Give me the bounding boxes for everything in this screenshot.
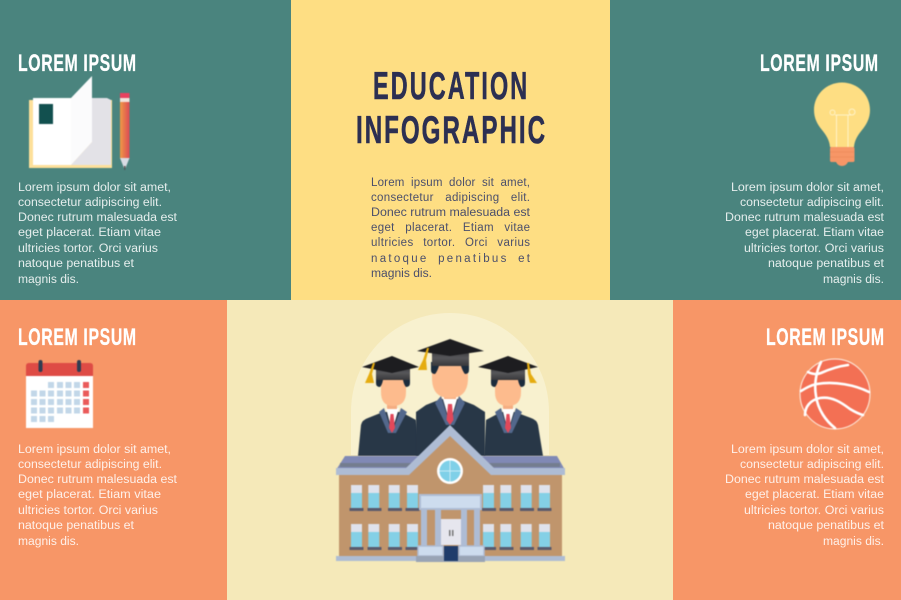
text block: bottom right: eget placerat. Etiam vitae	[745, 489, 884, 501]
text block: bottom right: Lorem ipsum dolor sit amet,	[731, 444, 884, 456]
text block: centre: eget placerat. Etiam vitae	[371, 222, 530, 234]
text block: top left: consectetur adipiscing elit.	[18, 197, 162, 209]
text block: top right: magnis dis.	[823, 274, 884, 286]
panel: top centre	[291, 0, 610, 300]
text block: top left: natoque penatibus et	[18, 258, 135, 270]
title	[356, 64, 545, 151]
icon: light bulb	[814, 82, 870, 166]
illustration: graduate centre	[416, 339, 485, 456]
icon: basketball	[800, 359, 870, 429]
illustration: school building	[336, 425, 565, 562]
text block: bottom right: magnis dis.	[823, 536, 884, 548]
text block: centre	[371, 177, 531, 280]
panel: top left	[0, 0, 291, 300]
illustration: halo behind graduates	[351, 313, 549, 455]
text block: centre: consectetur adipiscing elit.	[371, 192, 530, 204]
text block: top left: magnis dis.	[18, 274, 79, 286]
text block: bottom left	[18, 444, 178, 548]
illustration: graduate left	[358, 356, 420, 456]
text block: top left: Donec rutrum malesuada est	[18, 212, 178, 224]
icon: pencil	[120, 93, 130, 170]
text block: bottom left: Lorem ipsum dolor sit amet,	[18, 444, 171, 456]
panel: bottom right	[673, 300, 901, 600]
text block: top right: Donec rutrum malesuada est	[725, 212, 885, 224]
panel: bottom centre	[227, 300, 673, 600]
text block: bottom left: Donec rutrum malesuada est	[18, 474, 178, 486]
panel: bottom left	[0, 300, 227, 600]
portico	[416, 495, 485, 562]
text block: centre: natoque penatibus et	[371, 253, 531, 265]
text block: bottom left: magnis dis.	[18, 536, 79, 548]
panel: top right	[610, 0, 901, 300]
text block: top right: consectetur adipiscing elit.	[740, 197, 884, 209]
heading: bottom left: LOREM IPSUM	[18, 325, 136, 351]
text block: top left: ultricies tortor. Orci varius	[18, 243, 158, 255]
text block: centre: magnis dis.	[371, 268, 432, 280]
text block: centre: ultricies tortor. Orci varius	[371, 237, 530, 249]
text block: bottom left: consectetur adipiscing elit.	[18, 459, 162, 471]
text block: bottom left: eget placerat. Etiam vitae	[18, 489, 161, 501]
text block: top right: Lorem ipsum dolor sit amet,	[731, 182, 884, 194]
text block: top right: natoque penatibus et	[768, 258, 885, 270]
icon: calendar	[26, 360, 93, 428]
title: EDUCATION	[373, 64, 527, 107]
text block: bottom right: ultricies tortor. Orci varius	[744, 505, 884, 517]
text block: top right: eget placerat. Etiam vitae	[745, 227, 884, 239]
text block: bottom left: ultricies tortor. Orci varius	[18, 505, 158, 517]
text block: bottom right: natoque penatibus et	[768, 520, 885, 532]
text block: top right	[725, 182, 885, 286]
title: INFOGRAPHIC	[356, 108, 545, 151]
text block: top left	[18, 182, 178, 286]
heading: top left: LOREM IPSUM	[18, 51, 136, 77]
illustration: graduate right	[478, 356, 543, 456]
heading: bottom right: LOREM IPSUM	[766, 325, 884, 351]
text block: bottom right: consectetur adipiscing elit.	[740, 459, 884, 471]
text block: centre: Lorem ipsum dolor sit amet,	[371, 177, 530, 189]
windows	[350, 485, 552, 550]
text block: bottom right: Donec rutrum malesuada est	[725, 474, 885, 486]
heading: top right: LOREM IPSUM	[760, 51, 878, 77]
text block: centre: Donec rutrum malesuada est	[371, 207, 531, 219]
text block: top right: ultricies tortor. Orci varius	[744, 243, 884, 255]
icon: open book	[29, 76, 112, 168]
text block: top left: eget placerat. Etiam vitae	[18, 227, 161, 239]
text block: bottom left: natoque penatibus et	[18, 520, 135, 532]
text block: bottom right	[725, 444, 885, 548]
text block: top left: Lorem ipsum dolor sit amet,	[18, 182, 171, 194]
